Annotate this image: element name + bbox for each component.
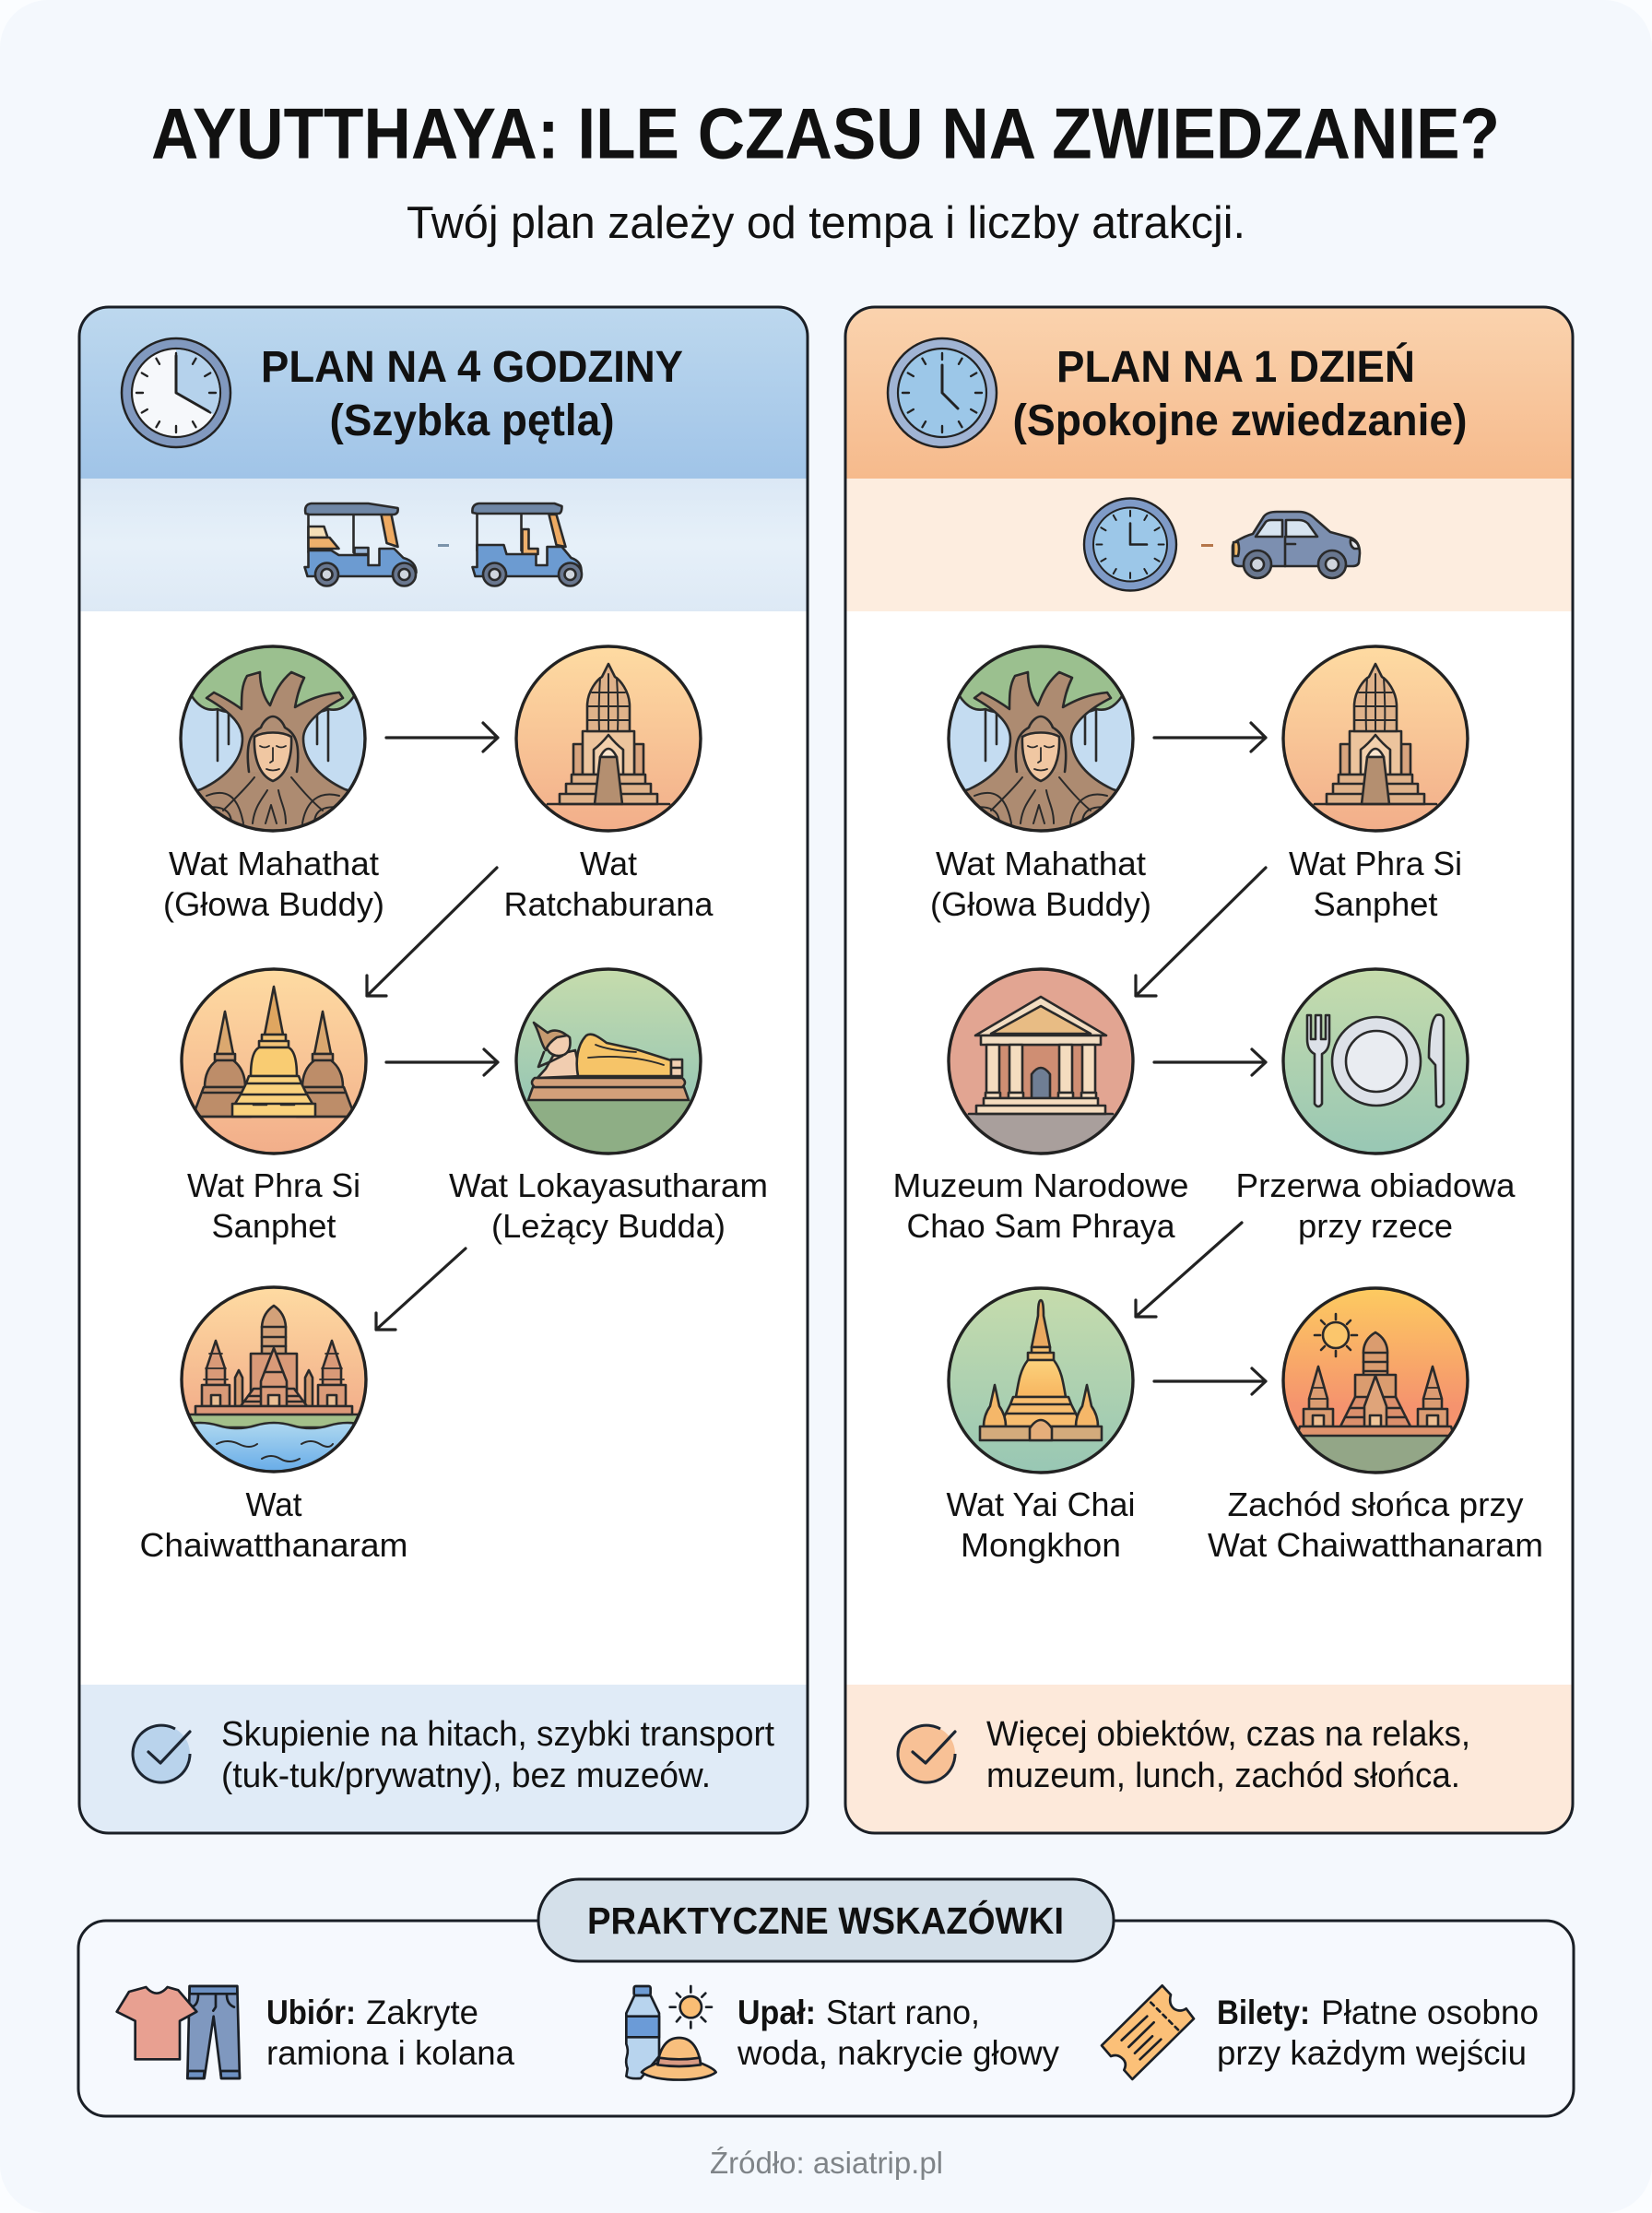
icon: check (898, 1725, 955, 1782)
icon: water, sun, hat (626, 1986, 716, 2080)
summary text: 1-day plan: muzeum, lunch, zachód słońca. (986, 1757, 1460, 1795)
stop: Wat Mahathat: (Głowa Buddy) (163, 885, 384, 923)
tip text: clothing: Ubiór: (266, 1994, 356, 2031)
stop: Wat Chaiwatthanaram: Chaiwatthanaram (140, 1526, 407, 1564)
stop: Wat Mahathat: Wat Mahathat (936, 845, 1146, 882)
tip text: heat: Upał: (738, 1994, 816, 2031)
stop: Muzeum Narodowe: Chao Sam Phraya (907, 1207, 1175, 1245)
stop: Wat Phra Si Sanphet: Sanphet (1313, 885, 1438, 923)
arrow: right (1154, 1368, 1266, 1394)
subtitle: Twój plan zależy od tempa i liczby atrakcji. (407, 198, 1245, 248)
summary band: 1-day plan (845, 1685, 1573, 1833)
stop: Wat Mahathat (163, 646, 384, 923)
panel heading: 1-day plan (1012, 342, 1468, 445)
summary text: 4-hour plan: Skupienie na hitach, szybki transport (221, 1715, 774, 1754)
stop: Wat Yai Chai Mongkhon: Mongkhon (961, 1526, 1121, 1564)
panel: 4-hour plan (79, 307, 808, 1833)
transport strip: 1-day plan (845, 479, 1573, 611)
summary text: 1-day plan: Więcej obiektów, czas na relaks, (986, 1715, 1470, 1754)
stop: Wat Chaiwatthanaram: Wat (245, 1485, 302, 1523)
icon: ticket (1102, 1985, 1194, 2079)
panel header band: 4-hour plan (79, 307, 808, 479)
tip text: heat: Start rano, (826, 1994, 980, 2031)
summary band: 4-hour plan (79, 1685, 808, 1833)
stop: Wat Yai Chai Mongkhon (946, 1288, 1136, 1564)
tip text: heat (737, 1994, 1059, 2072)
stop: Wat Lokayasutharam (449, 969, 768, 1245)
arrow: right (1154, 1049, 1266, 1075)
tip text: tickets: Płatne osobno (1321, 1994, 1539, 2031)
tip text: tickets (1217, 1994, 1539, 2072)
summary text: 4-hour plan: (tuk-tuk/prywatny), bez muzeów. (221, 1757, 711, 1795)
stop: sunset: Wat Chaiwatthanaram (1208, 1526, 1543, 1564)
arrow: right (386, 1049, 498, 1075)
stop: lunch break (1235, 969, 1516, 1245)
panel heading: 1-day plan: PLAN NA 1 DZIEŃ (1056, 342, 1415, 392)
separator dash (1201, 544, 1213, 547)
stop: Wat Mahathat: (Głowa Buddy) (930, 885, 1151, 923)
icon: tuk-tuk two (472, 503, 582, 586)
arrow: right (386, 723, 498, 751)
transport strip: 4-hour plan (79, 479, 808, 611)
panel heading: 4-hour plan: (Szybka pętla) (330, 396, 614, 445)
stop: lunch break: przy rzece (1298, 1207, 1453, 1245)
summary text: 4-hour plan (221, 1715, 774, 1795)
stop: sunset (1208, 1288, 1543, 1564)
stop: Wat Phra Si Sanphet: Wat Phra Si (1289, 845, 1462, 882)
panel border (79, 307, 808, 1833)
panel: 1-day plan (845, 307, 1573, 1833)
tip text: clothing (266, 1994, 514, 2072)
stop: Wat Mahathat: Wat Mahathat (169, 845, 379, 882)
panel: practical tips (78, 1879, 1574, 2116)
stop: Wat Phra Si Sanphet: Sanphet (212, 1207, 336, 1245)
icon: clothes (117, 1986, 240, 2078)
stop: Muzeum Narodowe (892, 969, 1189, 1245)
stop: sunset: Zachód słońca przy (1228, 1485, 1523, 1523)
arrow: down-left (376, 1249, 466, 1330)
arrow: down-left (1136, 1223, 1242, 1317)
icon: clock 4 hours (122, 338, 230, 447)
icon: clock 1 day (888, 338, 997, 447)
stop: Wat Phra Si Sanphet (182, 969, 366, 1245)
tip text: tickets: Bilety: (1217, 1994, 1310, 2031)
arrow: down-left (1136, 868, 1266, 996)
summary text: 1-day plan (986, 1715, 1470, 1795)
stop: Wat Chaiwatthanaram (140, 1287, 407, 1564)
icon: tuk-tuk one (304, 503, 417, 586)
stop: Wat Lokayasutharam: (Leżący Budda) (491, 1207, 726, 1245)
heading pill: PRAKTYCZNE WSKAZÓWKI (587, 1899, 1064, 1942)
panel border (845, 307, 1573, 1833)
stop: Wat Ratchaburana: Ratchaburana (503, 885, 714, 923)
panel heading: 4-hour plan (261, 343, 683, 445)
icon: small clock (1084, 498, 1176, 590)
tip text: clothing: ramiona i kolana (266, 2034, 514, 2072)
source: Źródło: asiatrip.pl (710, 2146, 943, 2180)
icon: check (133, 1725, 190, 1782)
arrow: right (1154, 723, 1266, 751)
stop: Wat Phra Si Sanphet (1283, 646, 1468, 923)
stop: lunch break: Przerwa obiadowa (1235, 1166, 1516, 1204)
stop: Wat Mahathat (930, 646, 1151, 923)
stop: Wat Yai Chai Mongkhon: Wat Yai Chai (946, 1485, 1136, 1523)
heading pill (538, 1879, 1114, 1961)
stop: Wat Phra Si Sanphet: Wat Phra Si (187, 1166, 360, 1204)
stop: Muzeum Narodowe: Muzeum Narodowe (892, 1166, 1189, 1204)
tip text: clothing: Zakryte (366, 1994, 478, 2031)
tip text: heat: woda, nakrycie głowy (737, 2034, 1059, 2072)
panel heading: 4-hour plan: PLAN NA 4 GODZINY (261, 343, 683, 392)
tip text: tickets: przy każdym wejściu (1217, 2034, 1527, 2072)
stop: Wat Ratchaburana: Wat (580, 845, 637, 882)
panel header band: 1-day plan (845, 307, 1573, 479)
separator dash (438, 544, 449, 547)
stop: Wat Ratchaburana (503, 646, 714, 923)
icon: car (1233, 512, 1360, 578)
panel heading: 1-day plan: (Spokojne zwiedzanie) (1012, 396, 1468, 445)
arrow: down-left (367, 868, 497, 996)
title: AYUTTHAYA: ILE CZASU NA ZWIEDZANIE? (151, 92, 1500, 173)
stop: Wat Lokayasutharam: Wat Lokayasutharam (449, 1166, 768, 1204)
